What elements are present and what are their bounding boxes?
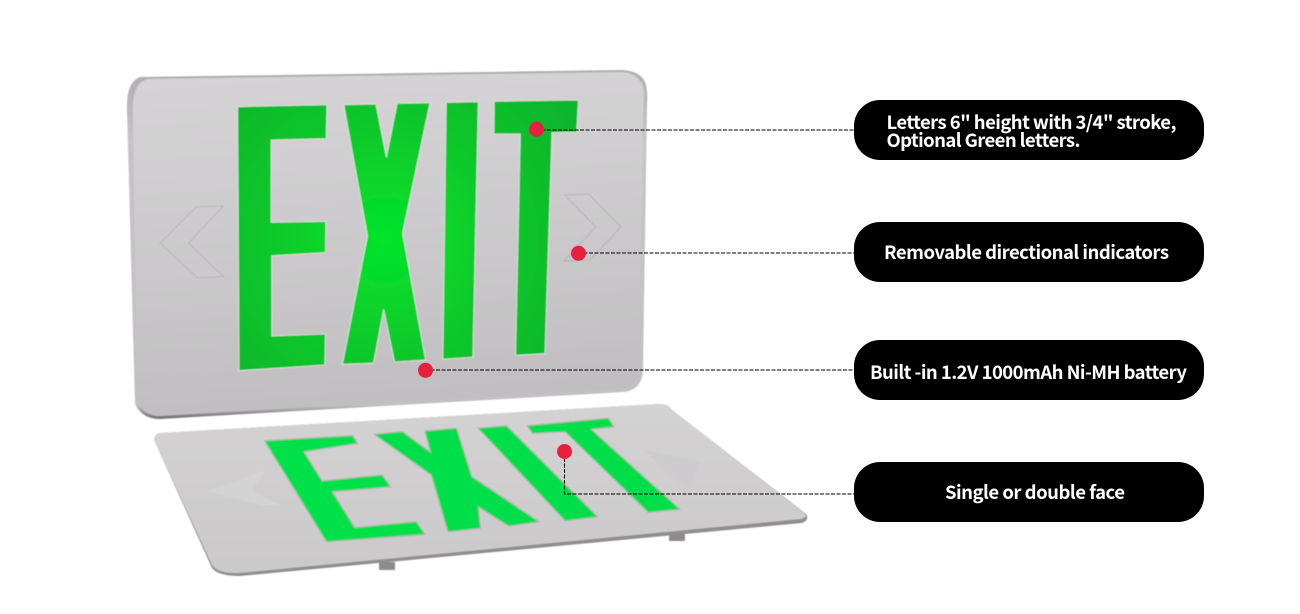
flat green letter X (374, 428, 539, 532)
flat right arrow (645, 450, 700, 492)
marker dot: battery (418, 363, 433, 378)
callout: indicators (854, 222, 1204, 282)
callout: face (854, 462, 1204, 522)
callout: letters: Optional Green letters. (886, 127, 1080, 153)
marker dot: indicators (571, 246, 586, 261)
callout: face: Single or double face (945, 479, 1125, 505)
callout: indicators: Removable directional indicators (884, 239, 1169, 265)
green letter X (342, 103, 430, 364)
callout: letters (854, 100, 1204, 160)
leader line: indicators (578, 252, 854, 254)
green letter T (494, 100, 578, 355)
callout: letters: Letters 6" height with 3/4" stroke, (886, 109, 1176, 135)
leader line: face (564, 458, 854, 494)
leader line: battery (425, 369, 854, 371)
mounting tab left (379, 562, 395, 570)
product photo: upright exit sign (127, 70, 647, 419)
right directional indicator (564, 194, 621, 261)
green letter E (238, 105, 327, 371)
flat left arrow (206, 470, 280, 505)
mounting tab right (669, 534, 685, 541)
callout: battery (854, 340, 1204, 400)
flat sign face (155, 404, 806, 573)
flat green letter E (264, 436, 425, 542)
marker dot: letters (529, 122, 544, 137)
left directional indicator (160, 206, 224, 278)
green letter I (443, 102, 478, 359)
flat green letter I (478, 426, 598, 521)
flat sign edge (155, 404, 807, 576)
marker dot: face (557, 444, 572, 459)
leader line: letters (536, 129, 854, 131)
flat green letter T (527, 418, 680, 512)
product photo: flat exit sign (155, 404, 807, 576)
sign body edge (127, 70, 647, 419)
callout: battery: Built -in 1.2V 1000mAh Ni-MH battery (870, 359, 1187, 385)
sign face (133, 72, 644, 416)
